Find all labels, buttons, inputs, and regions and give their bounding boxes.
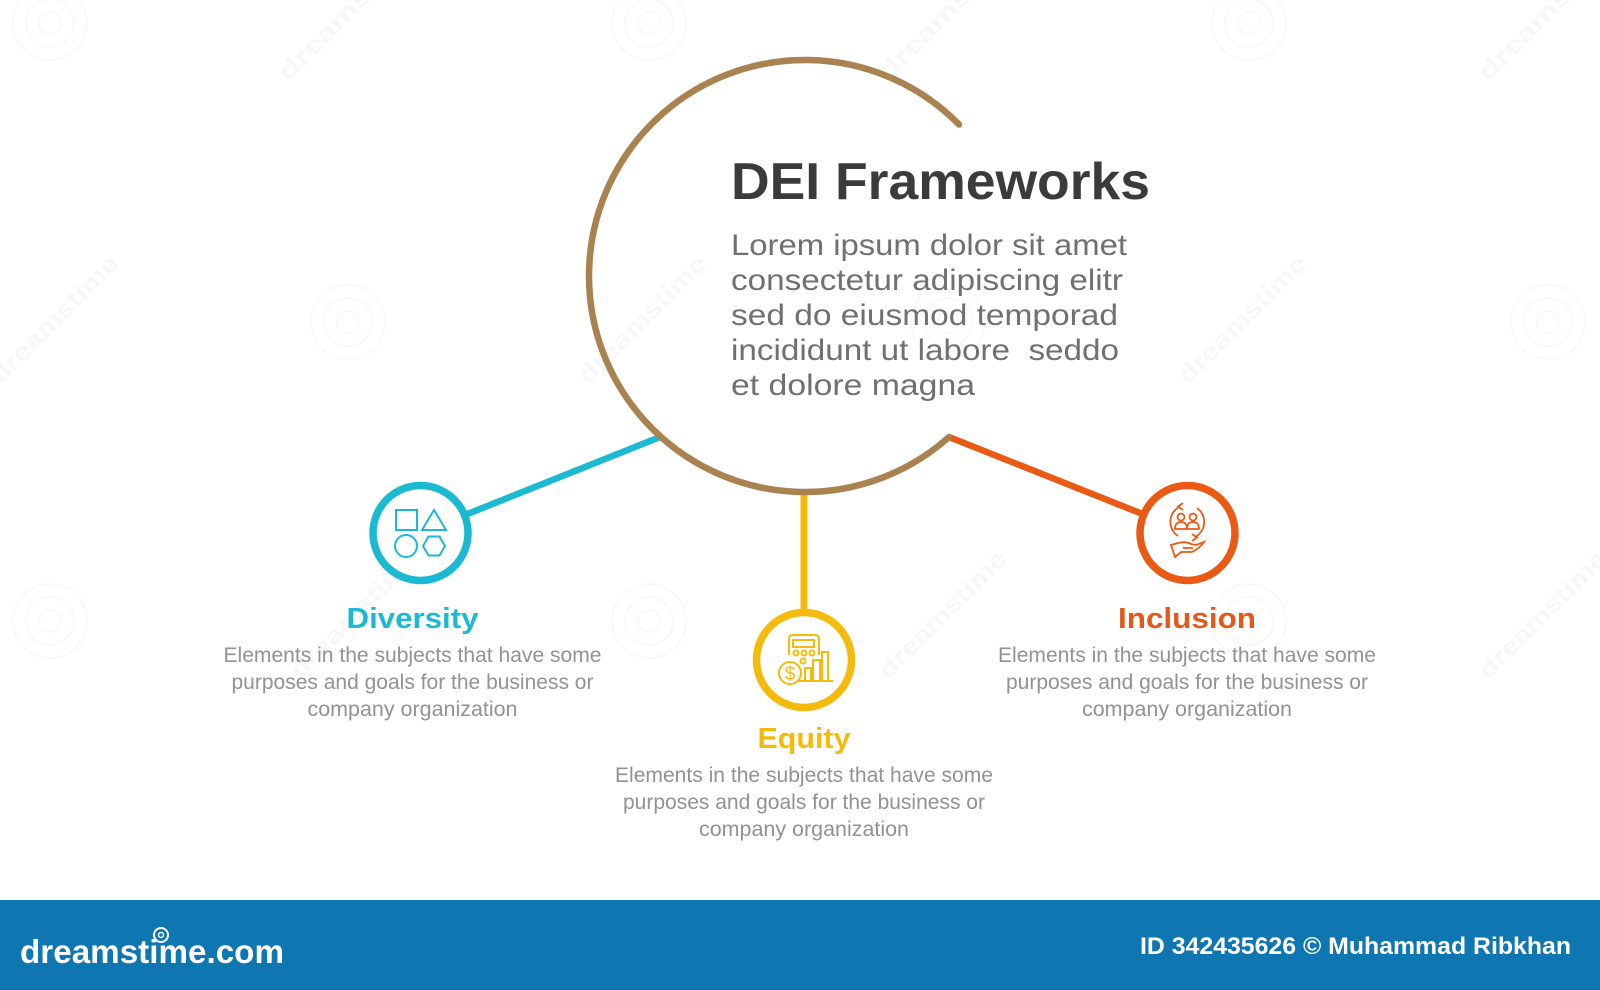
text: equity description: company organization [699, 818, 909, 841]
main body text: sed do eiusmod temporad [731, 299, 1118, 332]
text: diversity description: Elements in the subjects that have some [224, 644, 602, 667]
text: dreamstime [1473, 545, 1600, 684]
icon: diversity shapes [395, 510, 446, 557]
footer bar [0, 900, 1600, 990]
node: inclusion circle [1140, 486, 1235, 580]
title: DEI Frameworks [731, 153, 1150, 211]
text: inclusion description [998, 644, 1376, 721]
text: diversity description: company organization [308, 698, 518, 721]
icon: equity calculator and chart: $ [785, 664, 796, 685]
main body text: et dolore magna [731, 369, 975, 402]
connector: inclusion line [949, 437, 1145, 515]
main body text: Lorem ipsum dolor sit amet [731, 229, 1128, 262]
text: diversity description [224, 644, 602, 721]
footer credit: ID 342435626 © Muhammad Ribkhan [1140, 933, 1571, 960]
connector: equity line [800, 490, 808, 612]
icon: equity calculator and chart [779, 635, 833, 685]
text: dreams [873, 0, 977, 86]
text: dreamstime [573, 250, 712, 389]
text: equity description [615, 764, 993, 841]
text: dreamstime [1173, 250, 1312, 389]
text: inclusion description: purposes and goals for the business or [1006, 671, 1368, 694]
main body text [731, 229, 1128, 402]
text: diversity description: purposes and goals for the business or [232, 671, 594, 694]
label: equity: Equity [758, 723, 850, 755]
main body text: incididunt ut labore seddo [731, 334, 1119, 367]
text: dreamstime [285, 545, 424, 684]
text: dreams [1473, 0, 1577, 86]
node: equity circle [756, 612, 852, 708]
text: equity description: Elements in the subjects that have some [615, 764, 993, 787]
node: diversity circle [373, 486, 468, 580]
main body text: consectetur adipiscing elitr [731, 264, 1123, 297]
icon: inclusion people and hand [1170, 503, 1204, 557]
text: inclusion description: company organization [1082, 698, 1292, 721]
text: inclusion description: Elements in the subjects that have some [998, 644, 1376, 667]
connector: diversity line [465, 437, 660, 515]
text: dreamstime [873, 545, 1012, 684]
main open circle [589, 60, 959, 492]
footer logo: dreamstime: dreamstime.com [20, 933, 284, 970]
text: dreams [273, 0, 377, 86]
label: inclusion: Inclusion [1118, 603, 1256, 635]
text: equity description: purposes and goals for the business or [623, 791, 985, 814]
label: diversity: Diversity [346, 603, 478, 635]
